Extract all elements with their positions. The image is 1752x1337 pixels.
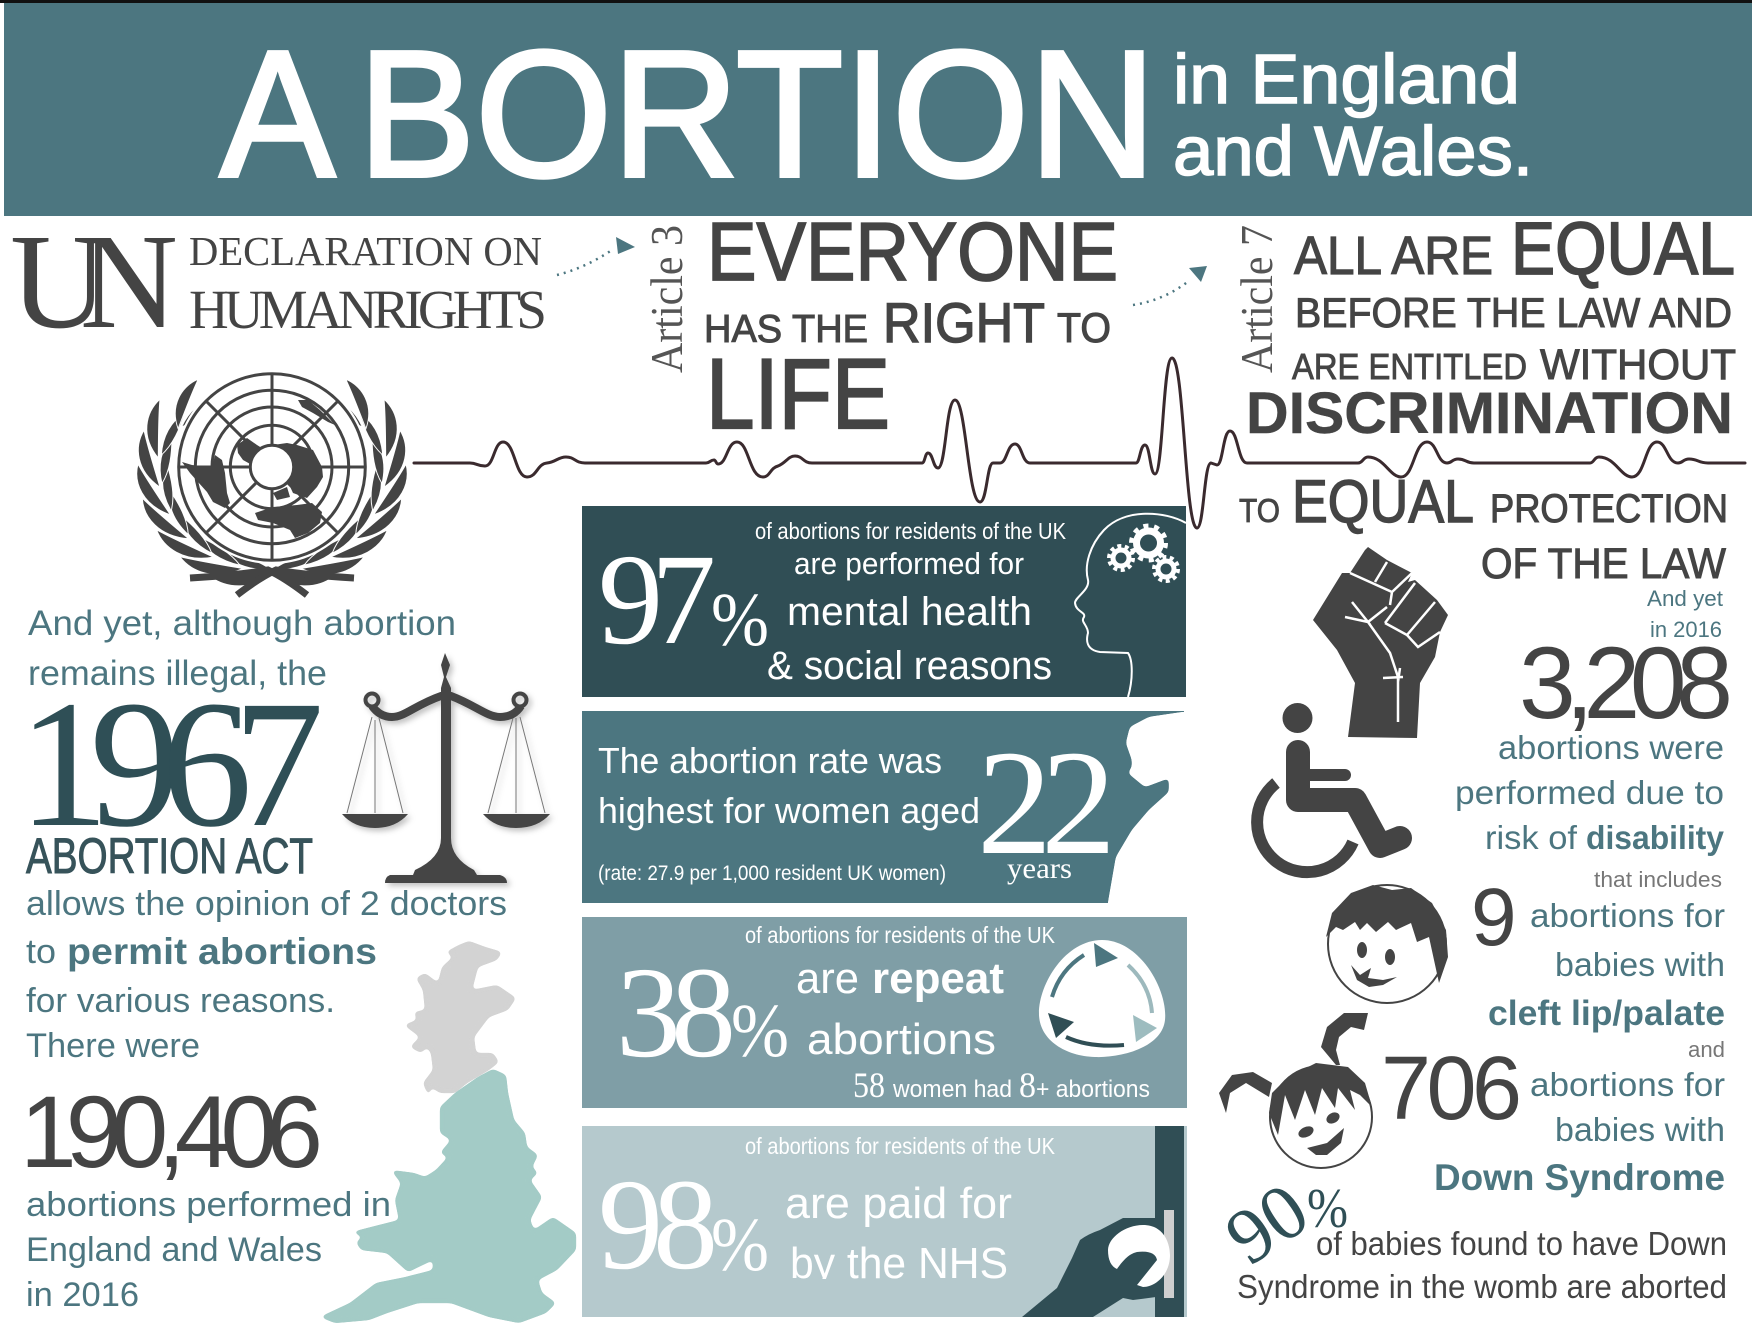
- icon: map of England and Wales: [320, 1069, 576, 1323]
- right stat text: abortions were: [1498, 729, 1724, 766]
- panel: 98% NHS: [582, 1126, 1187, 1317]
- article 3 quote: HAS THE: [704, 308, 868, 351]
- article 7 quote: OF THE LAW: [1481, 540, 1726, 588]
- icon: map of Scotland: [404, 941, 516, 1097]
- globe: [175, 370, 369, 564]
- cleft lip statistic: 9: [1471, 872, 1517, 963]
- panel: age 22: (rate: 27.9 per 1,000 resident UK women): [598, 862, 946, 885]
- panel: 97% mental health: are performed for: [794, 546, 1024, 581]
- panel: 97% mental health: %: [711, 578, 769, 662]
- right stat text: disability: [1586, 819, 1725, 856]
- cleft lip statistic: cleft lip/palate: [1488, 994, 1725, 1033]
- panel: 38% repeat: 8: [1019, 1065, 1036, 1105]
- panel: 38% repeat: are: [796, 954, 859, 1003]
- icon: woman silhouette: [1108, 712, 1200, 915]
- icon: boy face: [1326, 885, 1448, 1003]
- icon: wheelchair user: [1257, 703, 1400, 872]
- arrow to article 7: [1133, 266, 1207, 305]
- article 3 quote: RIGHT: [883, 291, 1045, 354]
- panel: 98% NHS: %: [711, 1203, 769, 1287]
- 90% statistic: %: [1307, 1178, 1348, 1240]
- title: A: [220, 14, 335, 215]
- 190,406: 190,406: [20, 1075, 323, 1189]
- left caption: abortions performed in: [26, 1186, 391, 1224]
- down syndrome statistic: Down Syndrome: [1434, 1157, 1725, 1198]
- 90% statistic: of babies found to have Down: [1316, 1225, 1727, 1262]
- article 7 quote: PROTECTION: [1490, 487, 1728, 531]
- subtitle: [1173, 40, 1533, 190]
- article 3 quote: EVERYONE: [707, 205, 1118, 298]
- panel: age 22: highest for women aged: [598, 790, 980, 831]
- icon: raised fist: [1313, 547, 1448, 738]
- article 3 quote: TO: [1057, 304, 1111, 351]
- arrow to article 3: [557, 237, 635, 275]
- down syndrome statistic: abortions for: [1530, 1066, 1725, 1103]
- article 3 quote: LIFE: [706, 338, 890, 449]
- panel: 97% mental health: [582, 506, 1186, 697]
- right stat text: that includes: [1594, 867, 1722, 892]
- article 3 quote: [704, 205, 1118, 449]
- title: BORTION: [358, 14, 1156, 215]
- article 3 label: Article 3: [642, 225, 692, 373]
- panel: 38% repeat: [582, 917, 1187, 1108]
- left intro text: [28, 604, 456, 693]
- left body text: for various reasons.: [26, 982, 335, 1020]
- panel: 97% mental health: 97: [598, 528, 716, 672]
- down syndrome statistic: babies with: [1555, 1111, 1725, 1148]
- left caption: [26, 1186, 391, 1314]
- article 7 label: Article 7: [1232, 225, 1282, 373]
- 90% statistic: Syndrome in the womb are aborted: [1237, 1268, 1727, 1305]
- panel: 97% mental health: mental health: [787, 590, 1032, 634]
- subtitle: in England: [1173, 40, 1520, 118]
- subtitle: and Wales.: [1173, 112, 1533, 190]
- right stat text: [1455, 586, 1733, 892]
- 90% statistic: [1210, 1165, 1727, 1305]
- 1967: 1967: [18, 664, 324, 865]
- left body text: There were: [26, 1027, 200, 1065]
- article 7 quote: ARE ENTITLED: [1292, 346, 1527, 387]
- UN declaration heading: [10, 207, 547, 357]
- article 7 quote: ALL ARE: [1294, 226, 1493, 286]
- panel: 97% mental health: & social reasons: [767, 644, 1052, 688]
- panel: 38% repeat: repeat: [872, 954, 1004, 1003]
- down syndrome statistic: 706: [1381, 1039, 1522, 1139]
- abortion act heading: ABORTION ACT: [26, 828, 313, 884]
- left body text: [26, 885, 507, 1065]
- panel: 98% NHS: of abortions for residents of the UK: [745, 1133, 1056, 1159]
- panel: 38% repeat: of abortions for residents of the UK: [745, 922, 1056, 948]
- down syndrome statistic: [1381, 1039, 1725, 1198]
- header band: [4, 3, 1752, 216]
- panel: age 22: 22: [977, 720, 1116, 886]
- icon: hand inserting card: [1022, 1126, 1184, 1317]
- 3,208: 3,208: [1519, 626, 1733, 740]
- article 7 quote: WITHOUT: [1540, 341, 1736, 389]
- article 7 quote: [1239, 207, 1736, 588]
- article 7 quote: TO: [1239, 492, 1280, 529]
- left body text: permit abortions: [67, 931, 377, 972]
- right stat text: And yet: [1647, 586, 1723, 611]
- panel: 38% repeat: 58: [853, 1065, 885, 1105]
- article 7 quote: EQUAL: [1292, 468, 1474, 535]
- cleft lip statistic: babies with: [1555, 946, 1725, 983]
- left caption: in 2016: [26, 1276, 139, 1314]
- panel: 38% repeat: 38: [616, 941, 736, 1085]
- icon: UN emblem: [132, 370, 412, 595]
- panel: 98% NHS: 98: [598, 1153, 718, 1297]
- right stat text: in 2016: [1650, 617, 1722, 642]
- panel: 38% repeat: women had: [892, 1076, 1012, 1103]
- icon: girl face: [1219, 1013, 1372, 1168]
- left caption: England and Wales: [26, 1231, 322, 1269]
- cleft lip statistic: and: [1688, 1037, 1725, 1062]
- panel: 98% NHS: by the NHS: [790, 1239, 1008, 1288]
- wreath: [132, 376, 412, 595]
- panel: age 22: The abortion rate was: [598, 740, 942, 781]
- 90% statistic: 90: [1210, 1165, 1323, 1281]
- right stat text: performed due to: [1455, 774, 1724, 811]
- panel: 38% repeat: abortions: [807, 1015, 996, 1064]
- panel: age 22: years: [1007, 852, 1072, 885]
- icon: head with gears: [1075, 514, 1186, 697]
- left intro text: remains illegal, the: [28, 654, 327, 693]
- left body text: to: [26, 933, 56, 971]
- panel: 98% NHS: are paid for: [785, 1179, 1012, 1228]
- panel: 38% repeat: + abortions: [1036, 1076, 1150, 1103]
- heartbeat line: [414, 358, 1745, 528]
- icon: repeat cycle: [1039, 940, 1165, 1057]
- left body text: allows the opinion of 2 doctors: [26, 885, 507, 923]
- icon: scales of justice: [342, 653, 550, 883]
- left intro text: And yet, although abortion: [28, 604, 456, 643]
- cleft lip statistic: [1471, 872, 1725, 1062]
- UN declaration heading: DECLARATION ON: [189, 228, 542, 274]
- panel: 97% mental health: of abortions for residents of the UK: [755, 518, 1067, 544]
- white strip under age panel: [1100, 903, 1200, 917]
- panel: 38% repeat: %: [731, 989, 789, 1073]
- article 7 quote: BEFORE THE LAW AND: [1295, 289, 1732, 336]
- UN declaration heading: HUMANRIGHTS: [189, 279, 547, 340]
- article 7 quote: DISCRIMINATION: [1246, 381, 1733, 446]
- UN declaration heading: UN: [10, 207, 178, 357]
- panel: age 22: [582, 711, 1200, 915]
- cleft lip statistic: abortions for: [1530, 897, 1725, 934]
- right stat text: risk of: [1485, 819, 1578, 856]
